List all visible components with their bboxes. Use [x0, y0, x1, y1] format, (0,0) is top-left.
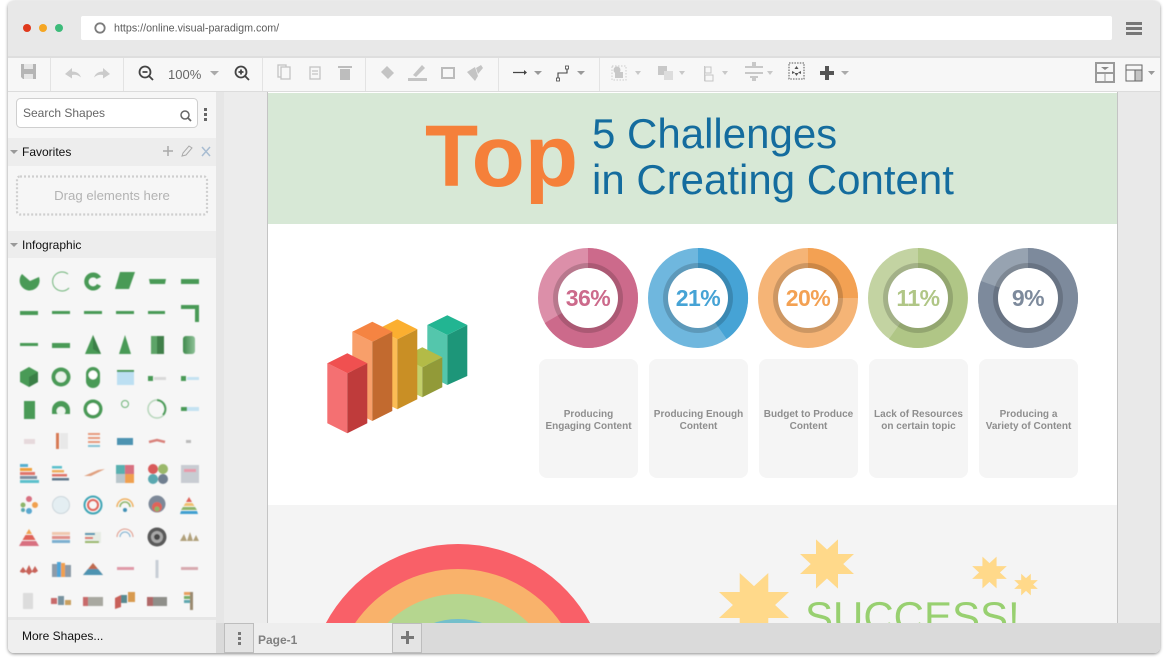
- card 2: [649, 359, 748, 478]
- donut 21%: [648, 248, 748, 348]
- address bar: https://online.visual-paradigm.com/: [114, 22, 279, 34]
- red bar: [327, 353, 367, 433]
- card 5: Variety of Content: [986, 421, 1072, 432]
- icon: save: [21, 64, 36, 79]
- title: challenges: 5 Challenges: [592, 110, 837, 157]
- more shapes footer: More Shapes...: [22, 629, 103, 643]
- icon: menu: [1126, 22, 1142, 35]
- card 3: [759, 359, 858, 478]
- sidebar: [8, 92, 216, 653]
- icon: fit selection: [789, 63, 804, 79]
- donut 20%: [758, 248, 858, 348]
- row 4: [20, 367, 199, 388]
- row 5: [24, 400, 199, 419]
- card 1: Producing: [564, 409, 613, 420]
- donut 11%: [868, 248, 968, 348]
- card 2: Producing Enough: [654, 409, 743, 420]
- stars: [719, 539, 1038, 637]
- infographic header: [8, 231, 216, 258]
- search box: Search Shapes: [23, 106, 105, 120]
- row 6: [24, 433, 191, 449]
- tab: Page-1: [254, 623, 392, 653]
- row 3: [20, 335, 195, 354]
- tab: Page-1: Page-1: [258, 633, 298, 647]
- card 3: Budget to Produce: [764, 409, 854, 420]
- search box: [16, 98, 198, 128]
- address bar: [81, 16, 1112, 40]
- canvas page: [268, 92, 1118, 640]
- title: challenges: in Creating Content: [592, 156, 954, 203]
- icon: zoom in: [236, 66, 249, 80]
- card 4: [869, 359, 968, 478]
- title bar: [23, 16, 1142, 40]
- icon: layout side panel: [1126, 65, 1155, 81]
- toolbar: [8, 56, 1160, 92]
- row 8: [20, 496, 198, 514]
- canvas background: [216, 92, 1160, 93]
- row 2: [20, 305, 199, 322]
- card 1: Engaging Content: [545, 421, 632, 432]
- drop area: [17, 176, 207, 214]
- olive bar: [402, 347, 442, 397]
- icon: waypoint connector: [556, 66, 585, 81]
- zoom level: 100%: [168, 67, 202, 82]
- success text: SUCCESS!: [805, 593, 1020, 640]
- 3D bar chart: [327, 315, 467, 433]
- lower panel: [268, 505, 1117, 640]
- more shapes footer: [8, 617, 216, 653]
- card 4: on certain topic: [881, 421, 956, 432]
- icons: fill line shadow format: [381, 65, 483, 81]
- title: Top: Top: [425, 108, 578, 205]
- drop area: Drag elements here: [54, 188, 170, 203]
- donut 21%: 21%: [676, 285, 720, 311]
- row 7: [20, 464, 199, 484]
- rainbow: [325, 544, 591, 624]
- row 11: [23, 592, 193, 610]
- card 1: [539, 359, 638, 478]
- donut 36%: 36%: [566, 285, 610, 311]
- row 9: [19, 528, 199, 546]
- yellow bar: [377, 319, 417, 409]
- donut 36%: [538, 248, 638, 348]
- orange bar: [352, 322, 392, 421]
- add page button: [392, 624, 422, 652]
- favorites header: Favorites: [22, 145, 71, 159]
- icon: layout panel: [1095, 62, 1115, 83]
- icons: copy paste delete: [278, 65, 352, 80]
- icon: undo and redo: [65, 68, 110, 78]
- tab menu button: [224, 624, 254, 652]
- donut 9%: 9%: [1012, 285, 1044, 311]
- icons: arrange group: [612, 62, 773, 81]
- shape thumbnails: [19, 272, 199, 610]
- card 5: [979, 359, 1078, 478]
- icon: zoom out: [140, 66, 153, 80]
- donut 11%: 11%: [896, 285, 940, 311]
- favorites header: [8, 138, 216, 166]
- donut 20%: 20%: [786, 285, 830, 311]
- card 4: Lack of Resources: [874, 409, 963, 420]
- row 10: [20, 560, 198, 578]
- icon: insert plus: [820, 66, 849, 80]
- icon: more options: [204, 108, 207, 121]
- infographic header: Infographic: [22, 238, 81, 252]
- teal bar: [427, 315, 467, 385]
- card 2: Content: [680, 421, 718, 432]
- donut 9%: [978, 248, 1078, 348]
- card 5: Producing a: [1000, 409, 1058, 420]
- row 1: [20, 272, 199, 291]
- header banner: [268, 93, 1117, 224]
- dropdown arrow: [210, 71, 219, 76]
- title: challenges: [592, 110, 954, 203]
- icon: connector arrow: [513, 70, 542, 75]
- window control dots: [23, 24, 63, 32]
- page tab bar: [216, 623, 1160, 653]
- card 3: Content: [790, 421, 828, 432]
